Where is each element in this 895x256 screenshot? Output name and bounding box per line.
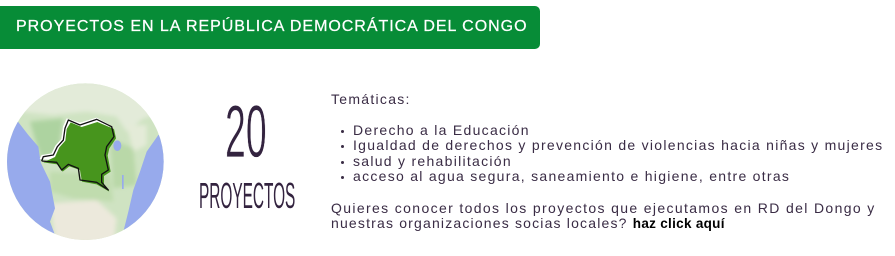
title: PROYECTOS EN LA REPÚBLICA DEMOCRÁTICA DEL CONGO [16,18,527,35]
themes list: Derecho a la Educación [353,122,530,138]
label proyectos: PROYECTOS [199,175,295,216]
number 20 [199,91,295,216]
title banner [0,6,540,49]
call to action: nuestras organizaciones socias locales? haz click aquí [331,215,725,231]
themes text: Temáticas: [331,91,411,107]
map of DR Congo [7,83,164,240]
call to action: Quieres conocer todos los proyectos que ejecutamos en RD del Dongo y [331,200,876,216]
themes list [341,122,883,184]
themes list: acceso al agua segura, saneamiento e higiene, entre otras [353,168,790,184]
themes list: salud y rehabilitación [353,153,512,169]
call to action [331,200,876,231]
themes list: Igualdad de derechos y prevención de violencias hacia niñas y mujeres [353,137,883,153]
number 20: 20 [225,91,267,173]
DRC shape [40,118,116,192]
